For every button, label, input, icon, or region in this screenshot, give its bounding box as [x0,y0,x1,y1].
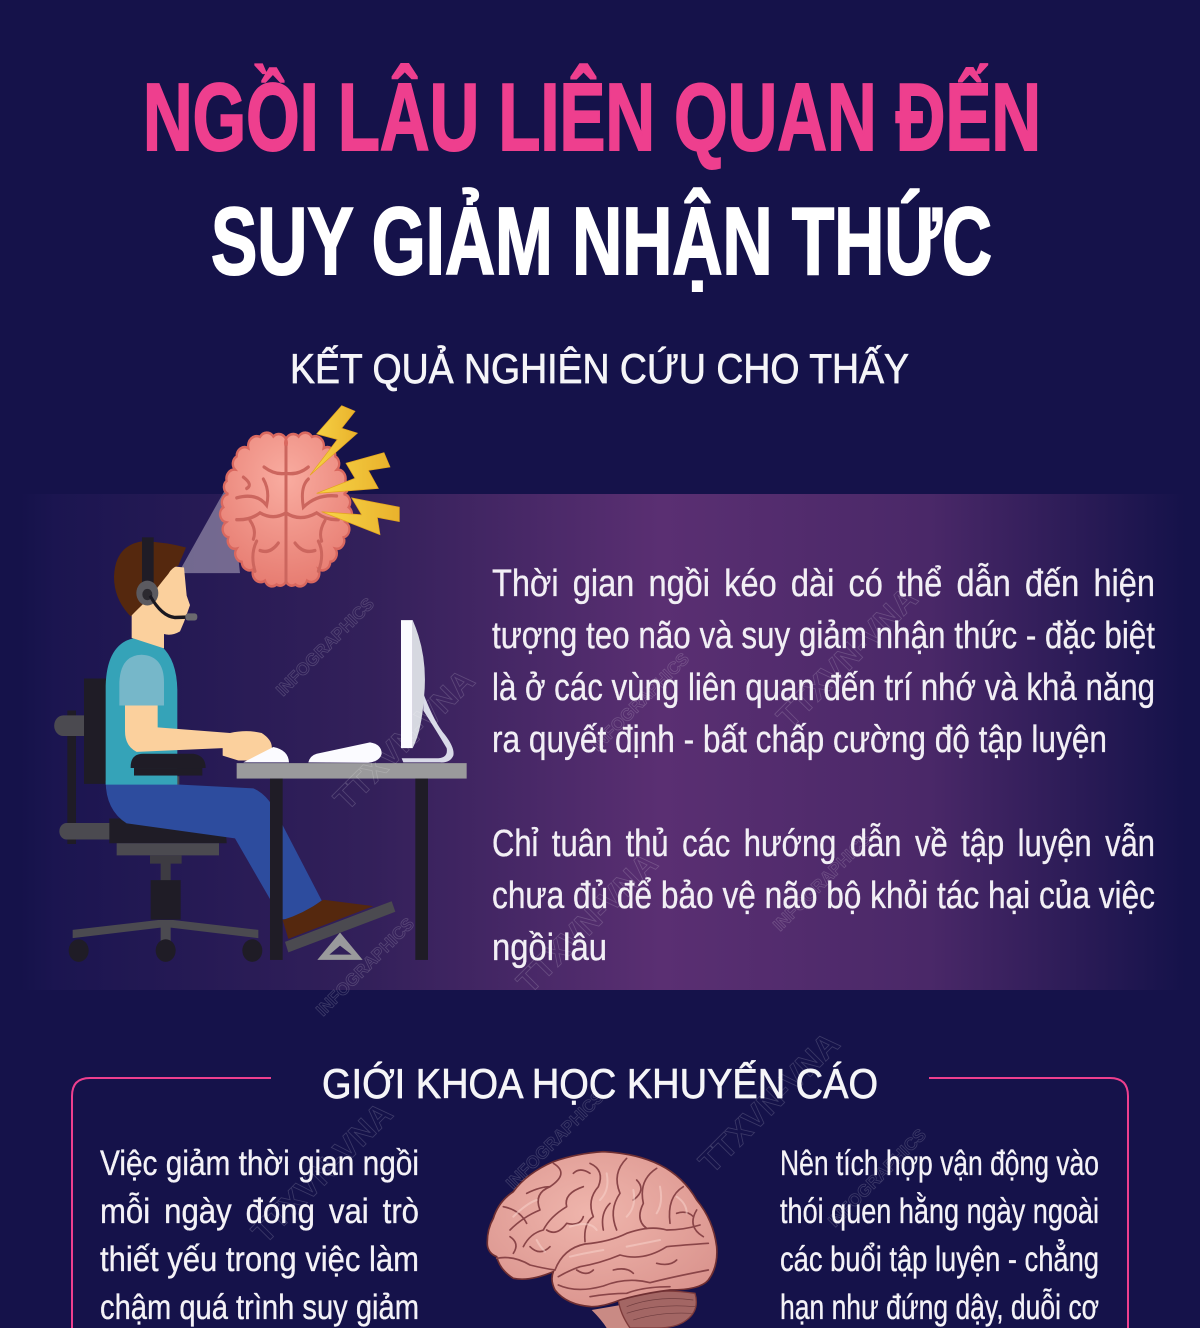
icon: mouse and keyboard [243,742,382,763]
text block: findings [492,562,1155,969]
watermarks: TTXVN-VNA [509,845,664,1000]
watermarks: INFOGRAPHICS [312,914,418,1020]
man: shirt [106,638,177,785]
text block: right recommendation: thói quen hằng ngày ngoài [780,1192,1099,1231]
heading: recommendations: GIỚI KHOA HỌC KHUYẾN CÁO [322,1060,878,1107]
man: shoe [283,900,373,939]
man: arm and hand [125,706,272,760]
man: sleeve [119,655,164,706]
thought beam [178,481,240,573]
watermarks: TTXVN-VNA [244,1095,399,1250]
watermarks: INFOGRAPHICS [272,594,378,700]
watermarks: INFOGRAPHICS [769,829,875,935]
icon: computer monitor [401,620,454,762]
text block: left recommendation [100,1144,419,1327]
icon: lightning bolts [310,406,399,535]
watermarks: INFOGRAPHICS [587,649,693,755]
icon: pink brain with lightning bolts [220,406,399,586]
text block: left recommendation: mỗi ngày đóng vai trò [100,1192,419,1231]
man: neck and face [132,566,190,648]
watermarks [244,580,930,1250]
watermarks: TTXVN-VNA [691,1025,846,1180]
brain outline [220,433,352,586]
text block: findings: ngồi lâu [492,927,607,969]
watermarks: TTXVN-VNA [326,662,481,817]
man: headset [136,537,197,621]
desk [237,763,467,960]
text block: left recommendation: thiết yếu trong việc làm [100,1240,419,1279]
text block: left recommendation: chậm quá trình suy giảm [100,1288,419,1327]
armrest [131,754,206,768]
icon: side view brain [487,1152,717,1328]
title [143,63,1041,295]
watermarks: TTXVN-VNA [769,580,924,735]
text block: right recommendation: hạn như đứng dậy, duỗi cơ [780,1288,1099,1327]
text block: right recommendation: các buổi tập luyện - chẳng [780,1239,1099,1279]
illustration: man sitting at computer [54,481,467,962]
text block: right recommendation [780,1144,1099,1327]
panel: research findings band [20,494,1185,990]
brain folds [237,447,338,583]
man: trousers [106,781,322,919]
text block: right recommendation: Nên tích hợp vận động vào [780,1144,1099,1183]
footrest [317,932,363,960]
icon: chair [54,678,262,962]
subtitle: KẾT QUẢ NGHIÊN CỨU CHO THẤY [290,344,909,392]
watermarks: INFOGRAPHICS [824,1125,930,1231]
text block: left recommendation: Việc giảm thời gian ngồi [100,1144,419,1183]
panel: recommendations frame [72,1078,1128,1328]
watermarks: INFOGRAPHICS [502,1087,608,1193]
man: hair [114,541,186,616]
